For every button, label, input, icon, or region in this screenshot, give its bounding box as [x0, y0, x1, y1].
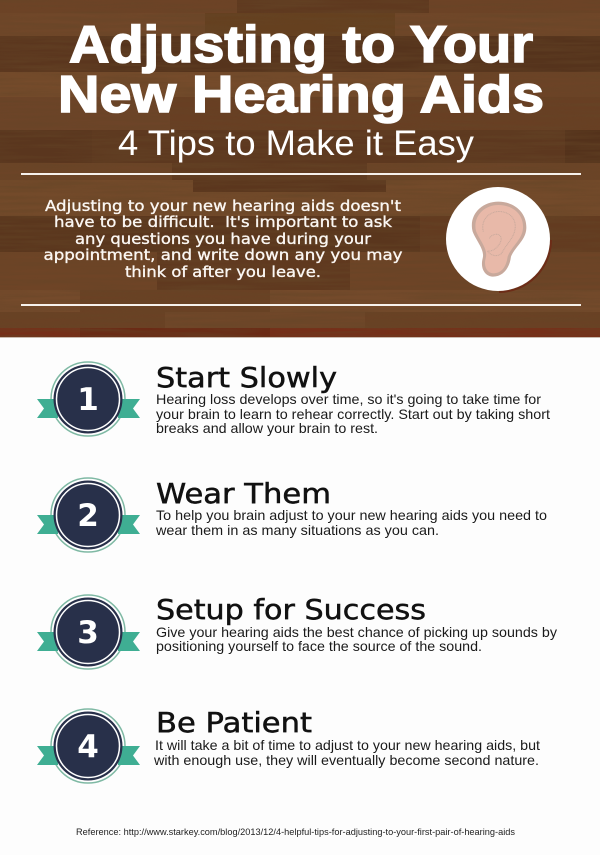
title: [58, 16, 544, 124]
intro text: any questions you have during your: [75, 230, 372, 248]
divider: lower rule: [21, 304, 581, 306]
title: Adjusting to Your: [69, 16, 533, 74]
icon: badge 4: [37, 709, 140, 783]
intro text: [44, 197, 403, 281]
intro text: think of after you leave.: [125, 263, 321, 281]
text: tip 2 body: wear them in as many situations as you can.: [155, 522, 439, 538]
icon: badge 2: 2: [77, 498, 99, 534]
text: tip 1 body: breaks and allow your brain to rest.: [156, 420, 378, 436]
icon: badge 4: 4: [77, 729, 99, 765]
text: tip 4 body: It will take a bit of time to adjust to your new hearing aids, but: [155, 737, 540, 753]
divider: upper rule: [21, 173, 581, 175]
text: tip 2 body: [155, 507, 547, 538]
subtitle: 4 Tips to Make it Easy: [118, 124, 475, 163]
heading: be patient: Be Patient: [156, 707, 312, 739]
panel: tip 3: [37, 594, 557, 669]
panel: tip 2: [37, 478, 547, 552]
title: New Hearing Aids: [58, 66, 544, 124]
text: tip 3 body: Give your hearing aids the best chance of picking up sounds by: [156, 624, 557, 640]
icon: badge 3: [37, 595, 140, 669]
text: tip 4 body: [153, 737, 540, 768]
text: tip 3 body: [156, 624, 557, 654]
text: tip 1 body: [156, 391, 550, 436]
panel: tip 4: [37, 707, 540, 783]
intro text: have to be difficult. It's important to ask: [54, 213, 392, 231]
text: tip 1 body: your brain to learn to rehear correctly. Start out by taking short: [156, 406, 550, 422]
heading: start slowly: Start Slowly: [156, 362, 337, 394]
icon: badge 1: 1: [77, 382, 99, 418]
icon: ear in white circle: [446, 187, 551, 292]
icon: badge 2: [37, 478, 140, 552]
intro text: Adjusting to your new hearing aids doesn't: [45, 197, 401, 215]
reference footer: Reference: http://www.starkey.com/blog/2013/12/4-helpful-tips-for-adjusting-to-your-first-pair-of-hearing-aids: [76, 827, 515, 838]
panel: wood header: [0, 0, 600, 338]
panel: tip 1: [37, 362, 550, 436]
text: tip 4 body: with enough use, they will eventually become second nature.: [153, 752, 539, 768]
heading: wear them: Wear Them: [156, 478, 331, 510]
text: tip 3 body: positioning yourself to face the source of the sound.: [156, 638, 482, 654]
text: tip 1 body: Hearing loss develops over time, so it's going to take time for: [156, 391, 541, 407]
intro text: appointment, and write down any you may: [44, 246, 403, 264]
icon: badge 3: 3: [77, 615, 99, 651]
heading: setup for success: Setup for Success: [156, 594, 426, 626]
text: tip 2 body: To help you brain adjust to your new hearing aids you need to: [156, 507, 547, 523]
icon: badge 1: [37, 362, 140, 436]
